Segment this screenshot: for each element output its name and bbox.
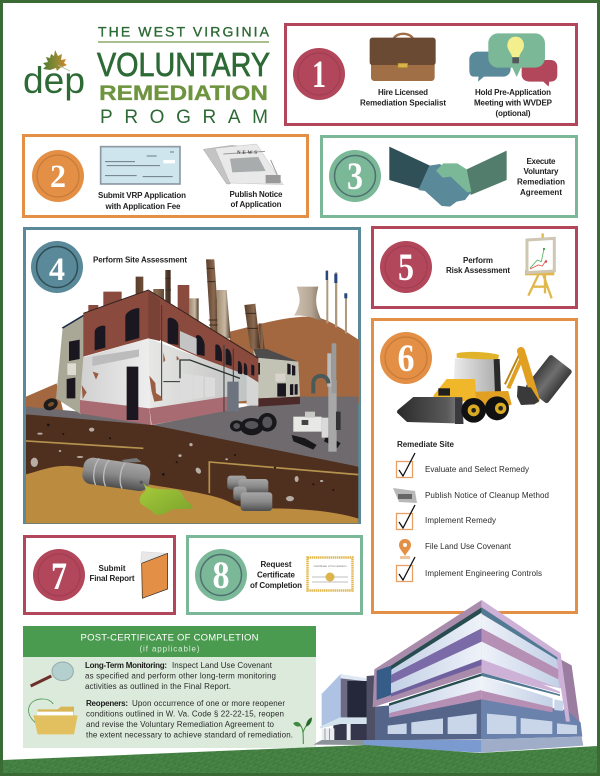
brick upper bbox=[83, 290, 258, 383]
text: submit final report: Submit bbox=[98, 564, 126, 573]
step number 7: 7 bbox=[51, 555, 67, 598]
text: publish notice: of Application bbox=[230, 200, 282, 209]
soil speckle bbox=[31, 428, 323, 501]
base right bbox=[482, 698, 582, 739]
base dark left bbox=[375, 698, 482, 740]
illustration: new office building bbox=[313, 600, 583, 753]
glass and stripes left bbox=[389, 613, 482, 718]
text: long-term monitoring: activities as outlined in the Final Report. bbox=[85, 682, 231, 691]
tire pile bbox=[230, 413, 277, 435]
text: pre-application meeting: Hold Pre-Application bbox=[475, 88, 551, 97]
title: VOLUNTARY bbox=[97, 46, 270, 83]
icon: map pin bbox=[399, 539, 411, 559]
step number 1: 1 bbox=[312, 53, 326, 96]
step number 6: 6 bbox=[398, 337, 414, 380]
step number 2 bbox=[32, 150, 84, 202]
item: publish: Publish Notice of Cleanup Method bbox=[425, 491, 549, 500]
seedling bbox=[293, 717, 312, 744]
text: submit final report bbox=[90, 564, 135, 583]
icon: backhoe loader bbox=[397, 351, 573, 424]
text: execute agreement: Agreement bbox=[520, 188, 562, 197]
panel: step 2 bbox=[24, 136, 308, 216]
icon: report book bbox=[141, 552, 168, 598]
panel: step 6 remediate site bbox=[372, 320, 576, 612]
icon: briefcase bbox=[370, 34, 436, 81]
right side wall bbox=[561, 659, 582, 737]
text: reopeners: Reopeners: bbox=[86, 699, 128, 708]
text: perform risk assessment bbox=[446, 256, 510, 275]
text: hire specialist: Remediation Specialist bbox=[360, 98, 446, 108]
text: execute agreement: Execute bbox=[526, 157, 556, 166]
frame left bbox=[373, 600, 482, 707]
text: submit application bbox=[98, 191, 186, 211]
panel: step 4 site assessment bbox=[24, 228, 360, 523]
header bar: (if applicable) bbox=[140, 644, 200, 654]
panel: step 1 bbox=[286, 24, 576, 124]
text: long-term monitoring: Inspect Land Use Covenant bbox=[172, 661, 273, 670]
icon: certificate: Certificate of Completion bbox=[314, 564, 347, 568]
text: execute agreement bbox=[517, 157, 565, 197]
side wing bbox=[313, 674, 375, 745]
newspaper masthead: NEWS bbox=[237, 151, 257, 156]
base walls bbox=[80, 397, 228, 425]
text: pre-application meeting bbox=[474, 88, 553, 118]
wall details bbox=[82, 305, 240, 412]
text: execute agreement: Voluntary bbox=[524, 167, 559, 176]
text: publish notice: Publish Notice bbox=[230, 190, 283, 199]
icon: certificate bbox=[308, 558, 352, 590]
panel: step 8 bbox=[188, 536, 362, 614]
white walls bbox=[80, 338, 258, 408]
dark line bbox=[391, 607, 557, 670]
soil layer bbox=[26, 414, 358, 523]
header bar bbox=[23, 626, 316, 657]
text: hire specialist bbox=[360, 88, 446, 108]
text: request certificate: of Completion bbox=[250, 581, 302, 590]
sand layer bbox=[26, 466, 358, 523]
icon: maple leaf bbox=[43, 50, 70, 71]
icon: newspaper bbox=[203, 144, 283, 185]
text: long-term monitoring: as specified and perform other long-term monitoring bbox=[85, 672, 276, 680]
text: submit final report: Final Report bbox=[90, 574, 135, 583]
chimneys bbox=[88, 259, 265, 350]
ground surface bbox=[26, 397, 358, 467]
text: reopeners: conditions outlined in W. Va. Code § 22-22-15, reopen bbox=[86, 710, 284, 718]
logo wordmark: dep bbox=[23, 60, 85, 101]
icon: magnifying glass bbox=[31, 662, 73, 686]
text: submit application: Submit VRP Application bbox=[98, 191, 186, 200]
checkbox: evaluate bbox=[396, 453, 415, 478]
panel: step 7 bbox=[24, 536, 174, 614]
panel: step 5 bbox=[372, 228, 576, 308]
logo: dep bbox=[23, 50, 85, 101]
text: reopeners: Upon occurrence of one or more reopener bbox=[132, 699, 285, 708]
item: file covenant: File Land Use Covenant bbox=[425, 542, 512, 551]
checkbox: engineering bbox=[396, 557, 415, 582]
page border bottom bbox=[0, 773, 600, 776]
drill rig bbox=[292, 343, 341, 452]
text: submit application: with Application Fee bbox=[104, 202, 181, 211]
ground floor windows bbox=[388, 714, 577, 734]
text: request certificate bbox=[250, 560, 302, 590]
step number 3: 3 bbox=[347, 155, 363, 198]
far house bbox=[253, 349, 300, 407]
text: hire specialist: Hire Licensed bbox=[378, 88, 428, 97]
text: reopeners: the extent necessary to achieve standard of remediation. bbox=[86, 730, 293, 740]
text: reopeners bbox=[86, 699, 293, 740]
blue corner window bbox=[377, 666, 391, 700]
title: PROGRAM bbox=[100, 107, 268, 128]
icon: check bbox=[101, 147, 180, 184]
title bbox=[97, 24, 270, 128]
text: publish notice bbox=[230, 190, 283, 209]
icon: handshake bbox=[389, 147, 507, 207]
distant stacks bbox=[326, 271, 347, 333]
checklist bbox=[393, 453, 549, 582]
grass ground bbox=[3, 745, 597, 773]
hills bbox=[26, 317, 359, 412]
item: engineering controls: Implement Engineering Controls bbox=[425, 569, 542, 578]
illustration: contaminated industrial site bbox=[26, 259, 359, 523]
step number 8 bbox=[195, 549, 247, 601]
step number 3 bbox=[329, 150, 381, 202]
text: request certificate: Request bbox=[260, 560, 292, 569]
text: request certificate: Certificate bbox=[257, 570, 296, 580]
text: reopeners: and revise the Voluntary Remediation Agreement to bbox=[86, 720, 275, 729]
text: long-term monitoring bbox=[85, 661, 276, 691]
text: execute agreement: Remediation bbox=[517, 178, 565, 186]
text: pre-application meeting: Meeting with WVDEP bbox=[474, 98, 553, 108]
text: perform risk assessment: Perform bbox=[463, 256, 493, 265]
step number 5: 5 bbox=[398, 246, 414, 289]
windows bbox=[95, 308, 254, 420]
frame right bbox=[482, 600, 570, 722]
text: perform risk assessment: Risk Assessment bbox=[446, 266, 510, 275]
step number 5 bbox=[380, 241, 432, 293]
left wing bbox=[56, 312, 89, 414]
tire by building bbox=[42, 396, 60, 413]
leaking tank bbox=[81, 456, 152, 492]
buried pipes bbox=[26, 441, 358, 493]
item: implement: Implement Remedy bbox=[425, 516, 496, 525]
step number 8: 8 bbox=[212, 554, 230, 597]
panel: step 3 bbox=[322, 136, 576, 216]
text: perform site assessment: Perform Site Assessment bbox=[93, 256, 187, 264]
icon: small newspaper bbox=[393, 488, 417, 503]
step number 6 bbox=[380, 332, 432, 384]
checkbox: implement bbox=[396, 505, 415, 530]
step number 1 bbox=[293, 48, 345, 100]
header bar: POST-CERTIFICATE OF COMPLETION bbox=[80, 632, 259, 644]
buried drums bbox=[227, 476, 272, 511]
glass and stripes right bbox=[482, 614, 563, 712]
icon: easel with chart bbox=[525, 233, 554, 298]
step number 2: 2 bbox=[50, 159, 66, 195]
step number 7 bbox=[33, 549, 85, 601]
step number 4 bbox=[31, 241, 83, 293]
cooling tower bbox=[294, 287, 322, 322]
panel: post-certificate of completion bbox=[23, 626, 316, 748]
plinth bbox=[363, 737, 583, 753]
text: long-term monitoring: Long-Term Monitoring: bbox=[85, 661, 167, 670]
item: evaluate: Evaluate and Select Remedy bbox=[425, 465, 529, 474]
icon: folder with arrow bbox=[29, 699, 78, 734]
step number 4: 4 bbox=[49, 252, 65, 288]
heading: remediate site: Remediate Site bbox=[397, 440, 455, 449]
icon: speech bubbles with light bulb bbox=[469, 33, 557, 87]
text: pre-application meeting: (optional) bbox=[496, 109, 531, 118]
title: THE WEST VIRGINIA bbox=[98, 24, 270, 40]
title: REMEDIATION bbox=[99, 82, 268, 105]
contaminant spill bbox=[140, 483, 193, 515]
